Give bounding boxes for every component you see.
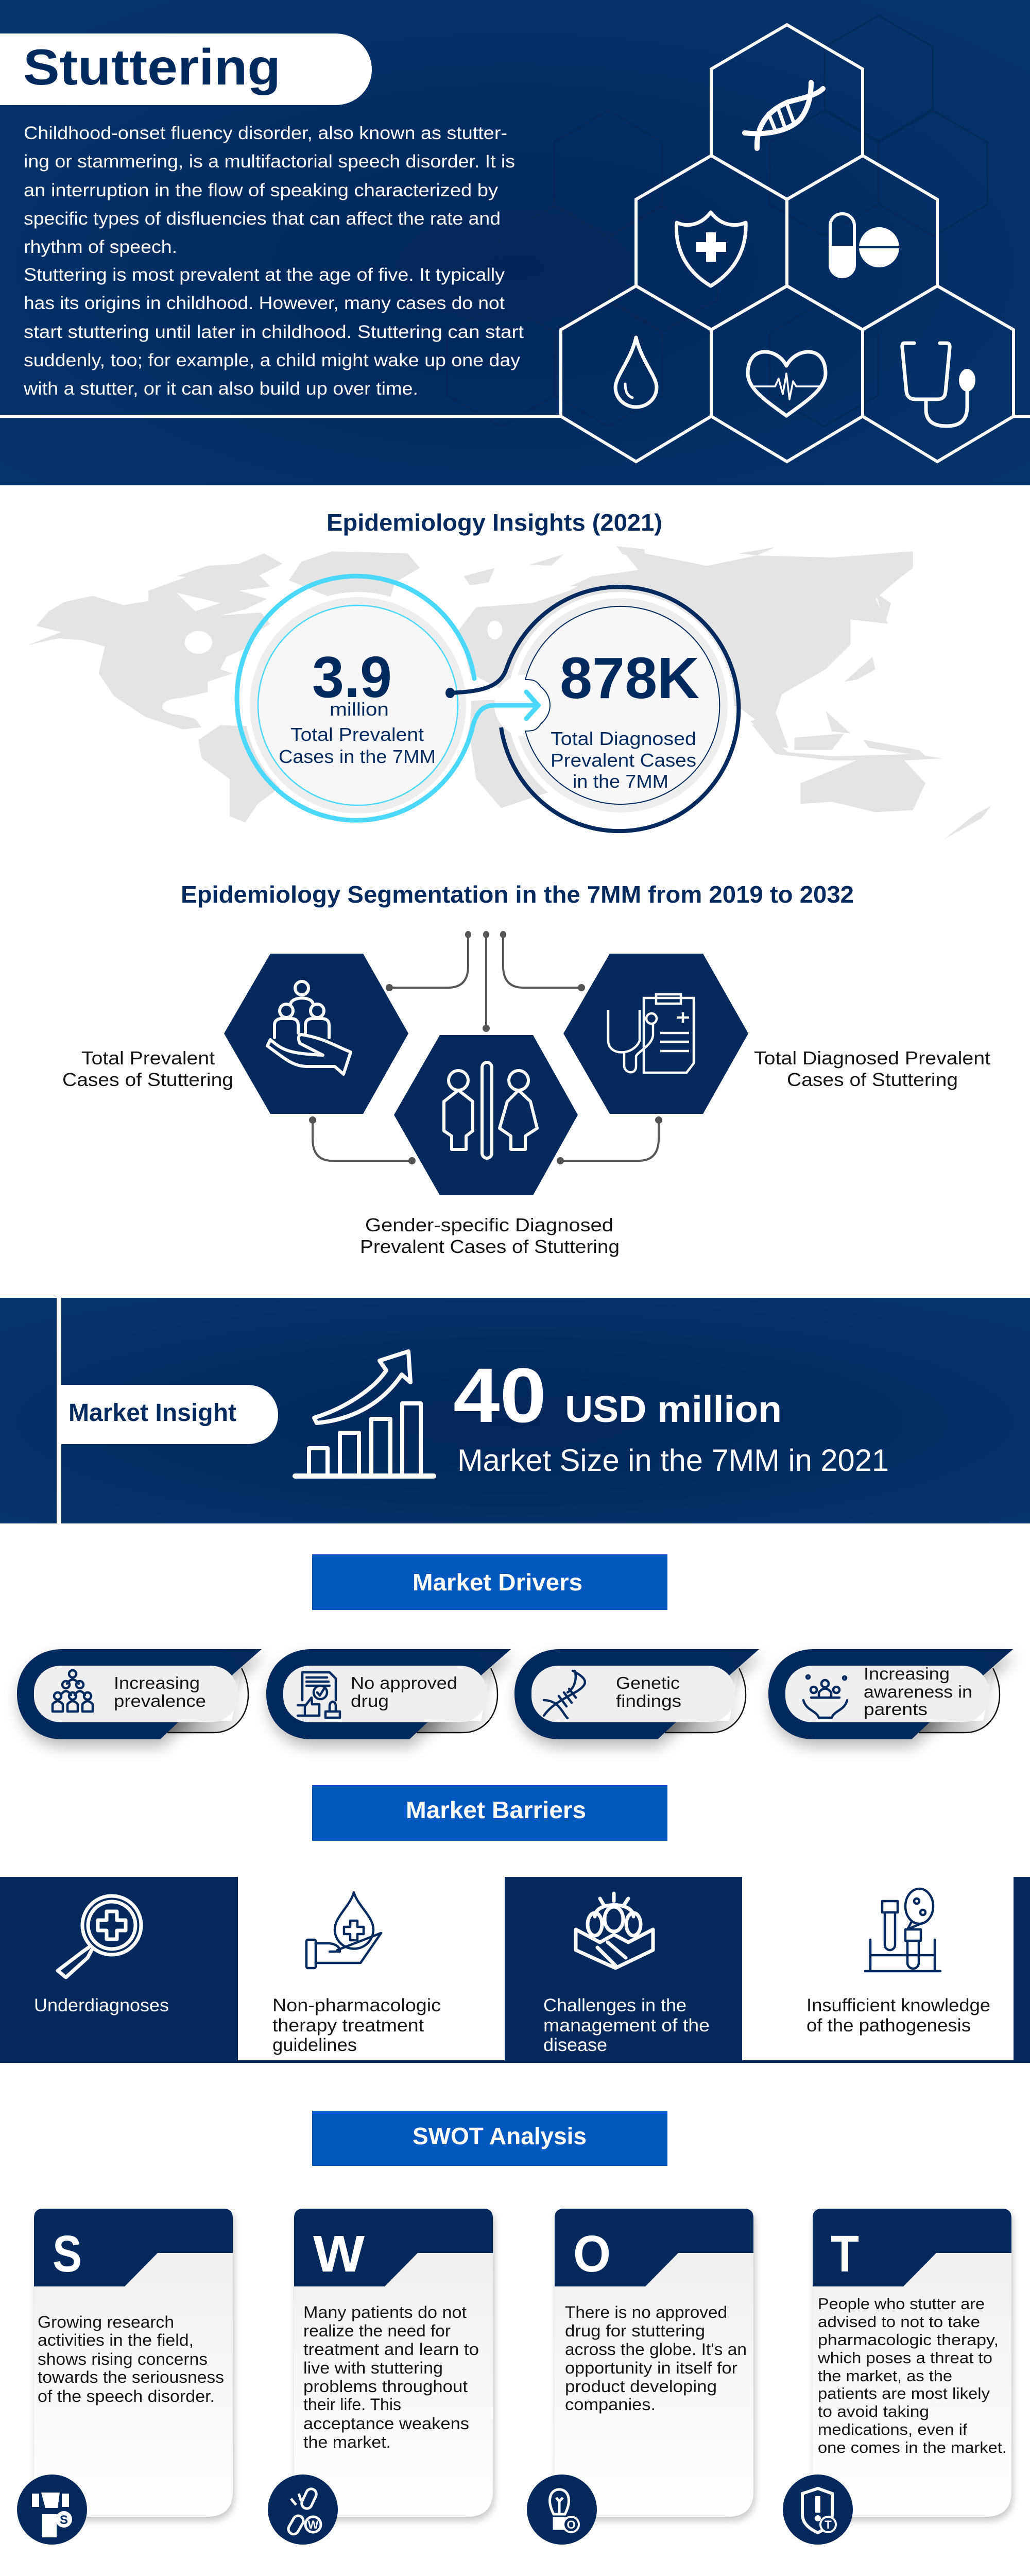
card: opportunities: product developing <box>565 2377 717 2396</box>
intro text: start stuttering until later in childhood. Stuttering can start <box>24 322 524 342</box>
hexagon: gender-specific icon <box>394 1035 578 1195</box>
intro text: suddenly, too; for example, a child might wake up one day <box>24 350 521 370</box>
header divider line <box>0 415 1030 418</box>
market insight pill: Market Insight <box>68 1399 236 1427</box>
icon: weaknesses badge: W <box>308 2518 319 2531</box>
intro text: specific types of disfluencies that can affect the rate and <box>24 209 501 229</box>
driver: no approved drug <box>266 1649 511 1739</box>
connector: navy ring with dot <box>445 587 739 831</box>
hexagon: diagnosed cases with stethoscope and clipboard icon <box>563 954 748 1114</box>
stat: 3.9 million: Total Prevalent <box>290 724 424 745</box>
card: weaknesses: problems throughout <box>303 2377 468 2396</box>
barrier: challenges in management <box>543 1893 710 2055</box>
card: opportunities: O <box>573 2225 611 2283</box>
icon: pills <box>829 214 901 278</box>
intro text: an interruption in the flow of speaking characterized by <box>24 180 499 200</box>
stat: 40 USD million <box>453 1352 889 1478</box>
card: strengths: Growing research <box>38 2313 174 2331</box>
stat: 878K: Prevalent Cases <box>551 750 696 771</box>
icon: strengths badge: S <box>60 2513 68 2527</box>
hexagon: prevalent cases with people in hand icon <box>224 954 408 1114</box>
icon: people pyramid <box>53 1670 93 1711</box>
driver: increasing awareness in parents: parents <box>864 1700 928 1719</box>
driver: increasing prevalence: Increasing <box>114 1673 200 1692</box>
stat: 3.9 million: Cases in the 7MM <box>279 746 436 767</box>
stat: 3.9 million <box>279 645 436 767</box>
heading: swot analysis <box>312 2111 667 2166</box>
icon: opportunities badge: O <box>566 2518 576 2531</box>
card: threats: patients are most likely <box>818 2384 990 2402</box>
icon: strengths badge <box>17 2475 87 2545</box>
heading: market drivers <box>312 1554 667 1610</box>
card: weaknesses <box>268 2209 493 2545</box>
icon: growth chart <box>295 1351 434 1476</box>
card: weaknesses: the market. <box>303 2433 391 2451</box>
barrier: challenges in management: Challenges in the <box>543 1995 686 2015</box>
card: strengths: towards the seriousness <box>38 2368 224 2386</box>
intro text: has its origins in childhood. However, many cases do not <box>24 293 505 313</box>
card: threats: medications, even if <box>818 2420 967 2438</box>
driver: no approved drug: No approved <box>351 1673 457 1692</box>
icon: threats badge <box>783 2475 853 2545</box>
card: strengths <box>17 2209 233 2545</box>
circle: total diagnosed prevalent cases <box>494 592 734 819</box>
stat: 40 USD million: 40 <box>453 1352 546 1438</box>
barrier: underdiagnoses: Underdiagnoses <box>34 1995 169 2015</box>
barrier: insufficient knowledge: Insufficient knowledge <box>806 1995 990 2015</box>
driver: increasing awareness in parents: awareness in <box>864 1682 972 1701</box>
card: weaknesses: W <box>313 2225 365 2283</box>
icon: opportunities badge <box>527 2475 597 2545</box>
driver: increasing prevalence <box>17 1649 262 1739</box>
stat: 878K <box>551 646 699 792</box>
card: threats: People who stutter are <box>818 2295 985 2313</box>
icon: dna <box>544 1671 585 1718</box>
driver: genetic findings: findings <box>616 1691 681 1710</box>
icon: water drop <box>615 337 657 407</box>
icon: stethoscope <box>902 343 975 426</box>
driver: no approved drug: drug <box>351 1691 389 1710</box>
panel: market barriers band <box>0 1877 1030 2063</box>
card: threats: pharmacologic therapy, <box>818 2331 999 2349</box>
barrier: challenges in management: management of the <box>543 2015 710 2036</box>
card: threats: to avoid taking <box>818 2402 929 2420</box>
icon: threats badge: T <box>825 2518 832 2531</box>
card: weaknesses: realize the need for <box>303 2321 451 2340</box>
panel: header <box>0 0 1030 485</box>
hexagon pyramid <box>561 25 1014 462</box>
stat: 878K: Total Diagnosed <box>551 728 696 749</box>
intro text: Stuttering is most prevalent at the age of five. It typically <box>24 265 505 285</box>
intro text: with a stutter, or it can also build up over time. <box>23 379 418 399</box>
driver: increasing prevalence: prevalence <box>114 1691 206 1710</box>
icon: group in hands <box>803 1675 847 1718</box>
stat: 878K: in the 7MM <box>573 771 668 792</box>
heading: epidemiology insights: Epidemiology Insights (2021) <box>327 509 662 536</box>
card: strengths: activities in the field, <box>38 2331 194 2349</box>
icon: shield <box>677 212 746 286</box>
barrier: underdiagnoses <box>34 1896 169 2015</box>
barrier: non-pharmacologic therapy: guidelines <box>272 2035 357 2055</box>
world map <box>27 546 991 839</box>
card: threats: advised to not to take <box>818 2313 980 2331</box>
card: opportunities: across the globe. It's an <box>565 2340 747 2359</box>
card: opportunities: companies. <box>565 2395 656 2414</box>
stat: 40 USD million: Market Size in the 7MM in 2021 <box>457 1443 889 1478</box>
card: strengths: shows rising concerns <box>38 2350 208 2368</box>
card: threats: one comes in the market. <box>818 2438 1007 2456</box>
arrow: cyan ring into right circle <box>237 576 538 820</box>
market insight pill <box>61 1385 278 1444</box>
stat: 3.9 million: 3.9 <box>312 645 392 709</box>
driver: increasing awareness in parents <box>768 1649 1013 1739</box>
heading: market barriers <box>312 1785 667 1841</box>
heading: market drivers: Market Drivers <box>413 1569 582 1596</box>
card: threats: T <box>831 2225 859 2283</box>
title: Stuttering <box>23 39 281 95</box>
barrier: insufficient knowledge <box>806 1889 990 2036</box>
stat: 878K: 878K <box>560 646 699 710</box>
panel: market insight <box>0 1298 1030 1523</box>
barrier: non-pharmacologic therapy: therapy treatment <box>272 2015 424 2036</box>
icon: heart <box>748 352 826 416</box>
card: weaknesses: live with stuttering <box>303 2359 443 2377</box>
label: gender-specific cases: Prevalent Cases of Stuttering <box>360 1236 620 1257</box>
card: opportunities: drug for stuttering <box>565 2321 705 2340</box>
card: threats: which poses a threat to <box>817 2349 992 2367</box>
card: strengths: S <box>53 2225 82 2283</box>
card: weaknesses: Many patients do not <box>303 2303 467 2321</box>
heading: epidemiology segmentation: Epidemiology Segmentation in the 7MM from 2019 to 2032 <box>181 881 854 908</box>
stat: 40 USD million: USD million <box>565 1389 782 1430</box>
card: opportunities: opportunity in itself for <box>565 2359 737 2377</box>
driver: genetic findings: Genetic <box>616 1673 680 1692</box>
card: threats: the market, as the <box>818 2367 952 2385</box>
card: opportunities: There is no approved <box>565 2303 727 2321</box>
label: total prevalent cases of stuttering <box>62 1047 233 1090</box>
intro text <box>23 123 524 399</box>
label: total diagnosed prevalent cases of stuttering: Total Diagnosed Prevalent <box>754 1047 990 1069</box>
barrier: challenges in management: disease <box>543 2035 607 2055</box>
heading: market barriers: Market Barriers <box>406 1797 586 1823</box>
circle: total prevalent cases <box>245 592 471 819</box>
label: total prevalent cases of stuttering: Cases of Stuttering <box>62 1069 233 1090</box>
intro text: ing or stammering, is a multifactorial speech disorder. It is <box>24 151 515 172</box>
label: total diagnosed prevalent cases of stuttering <box>754 1047 990 1090</box>
label: gender-specific cases: Gender-specific Diagnosed <box>365 1214 613 1235</box>
label: gender-specific cases <box>360 1214 620 1257</box>
barrier: insufficient knowledge: of the pathogenesis <box>806 2015 971 2036</box>
card: weaknesses: treatment and learn to <box>303 2340 479 2359</box>
heading: swot analysis: SWOT Analysis <box>413 2123 587 2149</box>
title pill <box>0 33 372 105</box>
barrier: non-pharmacologic therapy: Non-pharmacologic <box>272 1995 441 2015</box>
icon: document approval <box>298 1672 340 1718</box>
card: weaknesses: acceptance weakens <box>303 2414 469 2433</box>
intro text: rhythm of speech. <box>24 237 177 257</box>
intro text: Childhood-onset fluency disorder, also known as stutter- <box>24 123 507 143</box>
card: threats <box>783 2209 1011 2545</box>
icon: weaknesses badge <box>268 2475 338 2545</box>
icon: dna <box>745 82 823 148</box>
card: strengths: of the speech disorder. <box>38 2387 215 2405</box>
label: total diagnosed prevalent cases of stuttering: Cases of Stuttering <box>787 1069 958 1090</box>
card: weaknesses: their life. This <box>303 2395 401 2414</box>
barrier: non-pharmacologic therapy <box>272 1892 441 2055</box>
stat: 3.9 million: million <box>330 699 389 720</box>
driver: genetic findings <box>514 1649 759 1739</box>
connectors between hexagons <box>309 931 662 1164</box>
card: opportunities <box>527 2209 753 2545</box>
label: total prevalent cases of stuttering: Total Prevalent <box>81 1047 215 1069</box>
driver: increasing awareness in parents: Increasing <box>864 1664 950 1683</box>
